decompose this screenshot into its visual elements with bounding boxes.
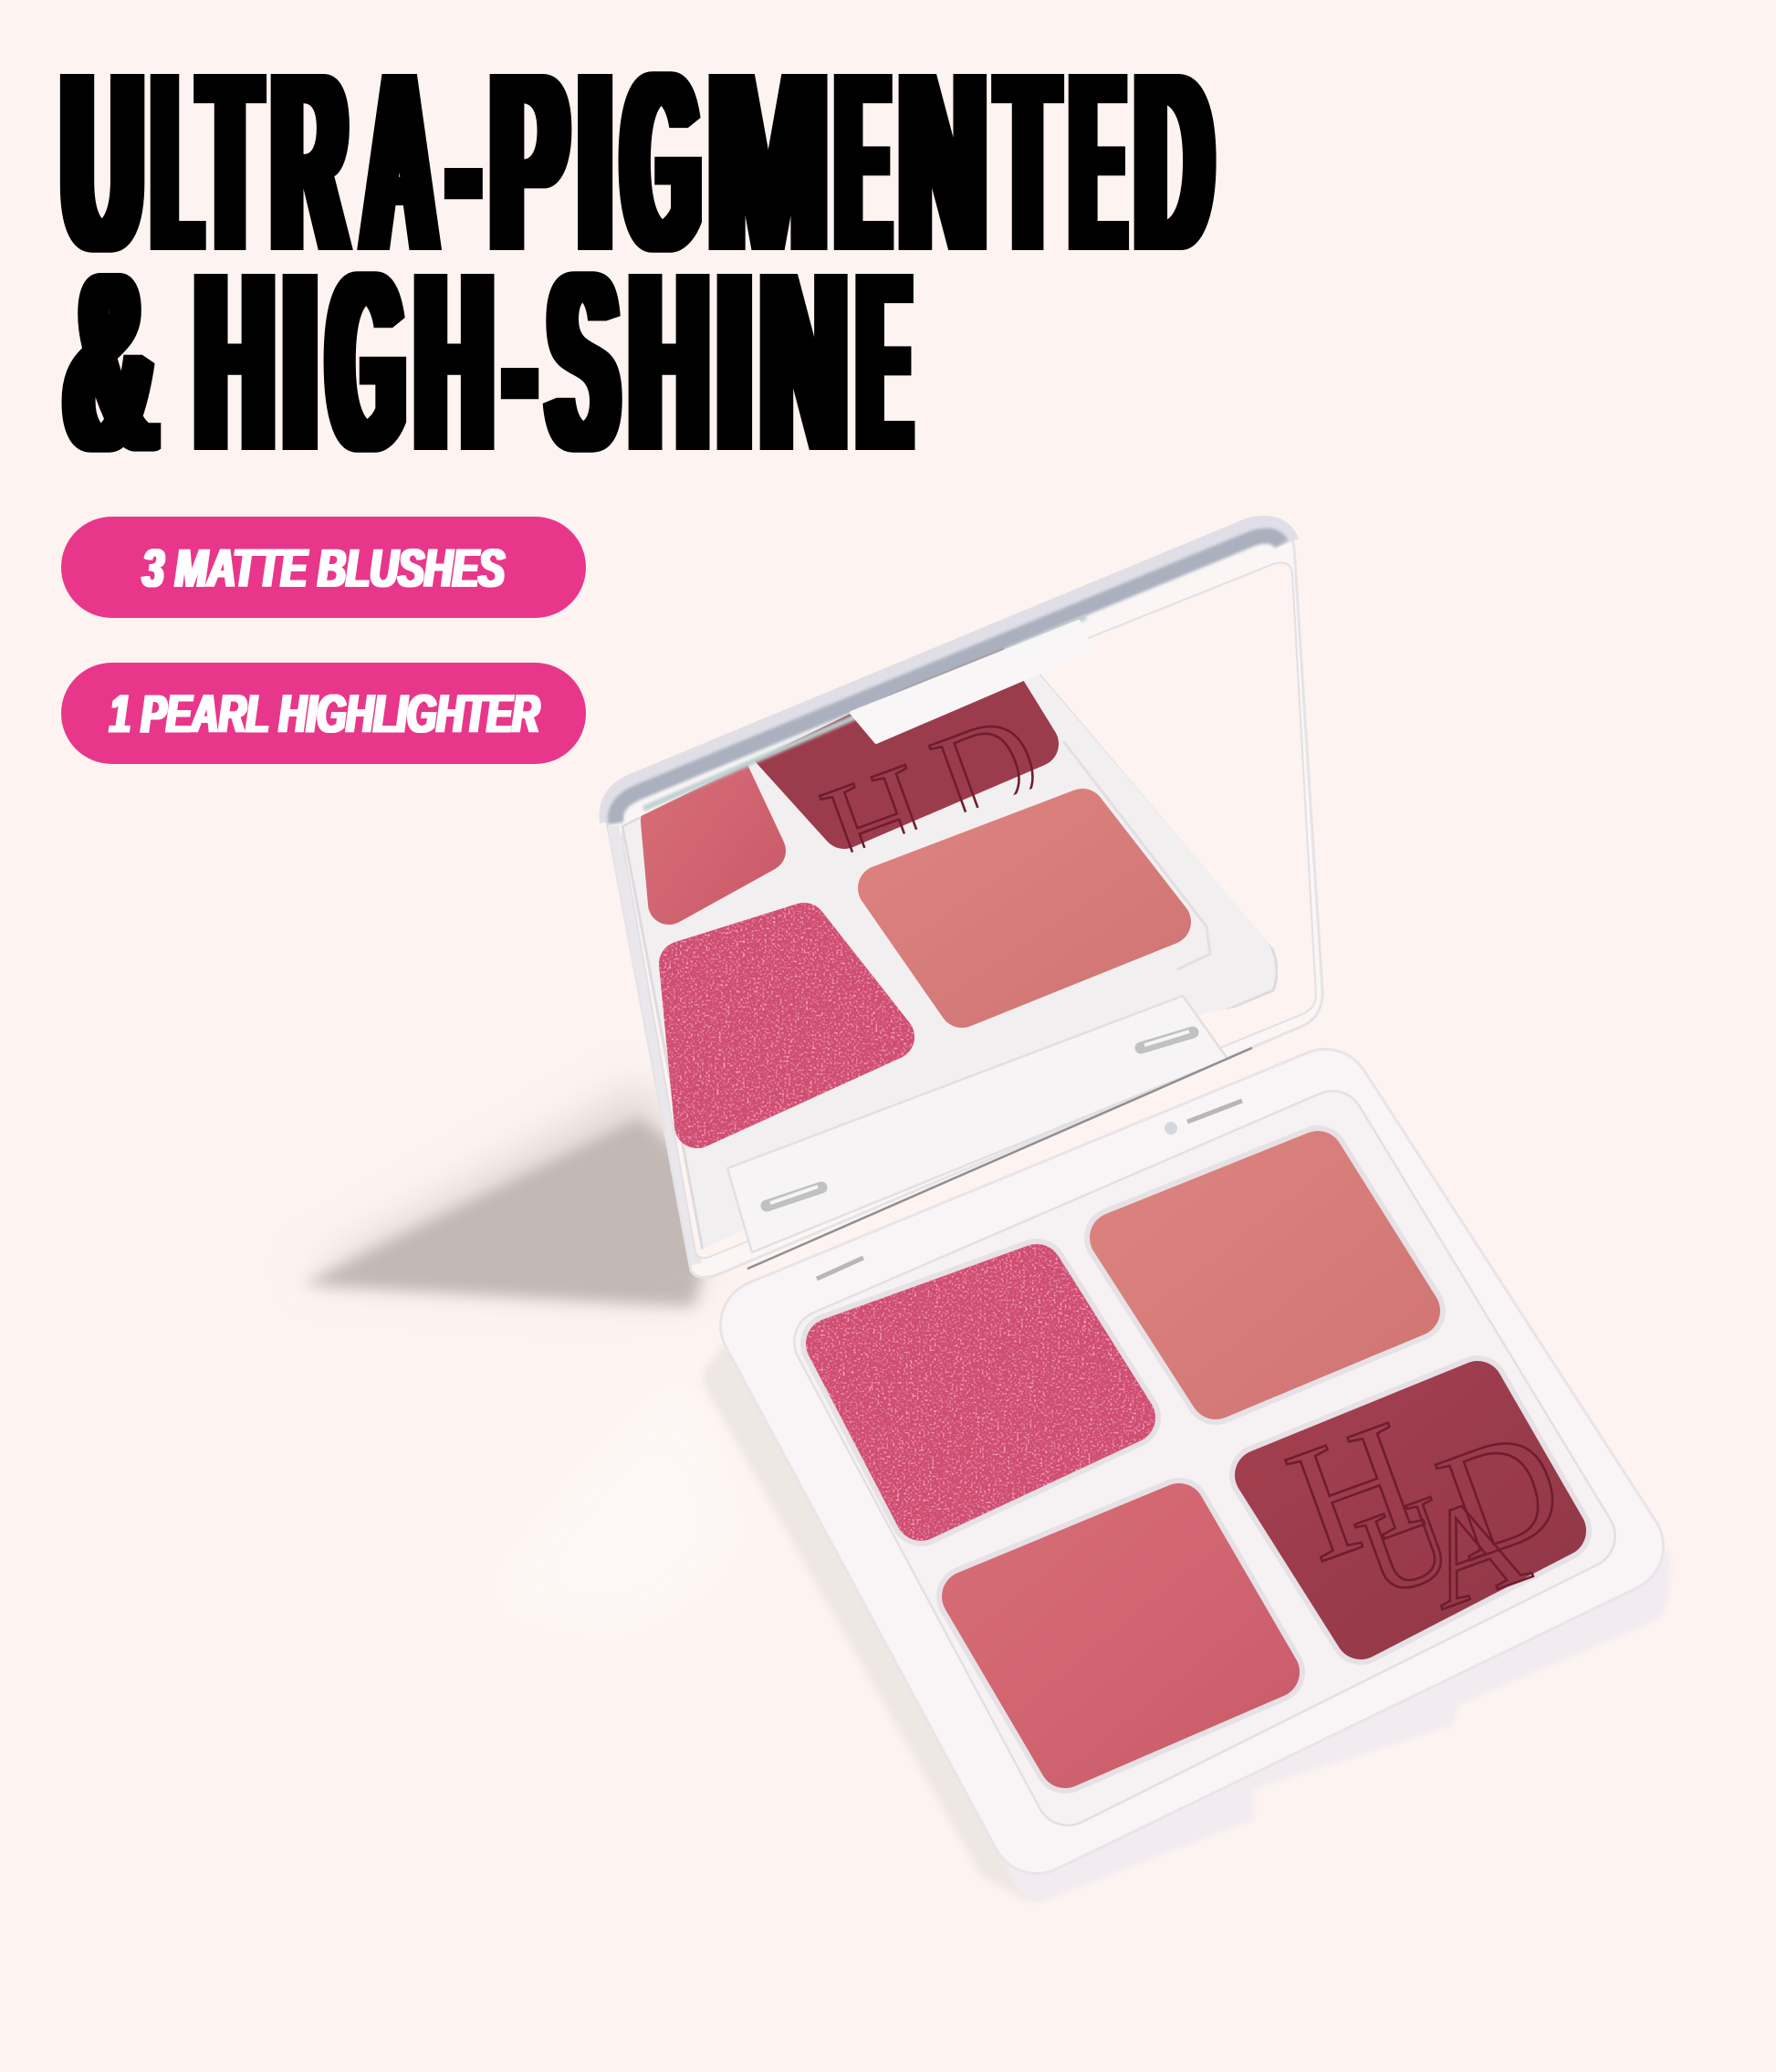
mirror surface <box>622 562 1316 1258</box>
hinge left on lid <box>767 1187 821 1206</box>
title: - <box>507 219 533 504</box>
pill: 1 pearl highlighter: 1 PEARL HIGHLIGHTER <box>110 685 539 744</box>
hinge seam <box>747 1048 1252 1269</box>
title: N <box>900 20 986 305</box>
text: D <box>1136 20 1211 305</box>
hinge right on lid <box>1141 1031 1193 1048</box>
reflected logo <box>818 725 1034 853</box>
mirror lid <box>606 520 1322 1277</box>
blush palette base <box>721 1048 1670 1901</box>
title: S <box>549 219 617 504</box>
title: P <box>491 20 567 305</box>
lid left edge <box>613 826 696 1264</box>
reflected logo: D <box>915 685 1060 862</box>
cast shadow <box>303 1082 721 1306</box>
title: U <box>63 20 142 305</box>
pill: 1 pearl highlighter <box>61 663 586 764</box>
title: - <box>451 20 476 305</box>
light reflection on surface <box>456 1324 757 1643</box>
light blush pan <box>1115 1156 1415 1394</box>
lid body <box>606 520 1322 1277</box>
reflected well line <box>1063 741 1210 969</box>
pill: 3 matte blushes: 3 MATTE BLUSHES <box>142 539 505 599</box>
reflected mid blush pan <box>662 758 765 904</box>
title: G <box>329 219 403 504</box>
title: R <box>273 20 346 305</box>
title: M <box>708 20 828 305</box>
title: I <box>718 219 751 504</box>
shimmer highlighter pan <box>831 1270 1130 1515</box>
reflected base tray <box>622 636 1277 1251</box>
title: L <box>154 20 199 305</box>
title: T <box>202 20 258 305</box>
title: H <box>631 219 707 504</box>
pan pockets <box>831 1156 1561 1763</box>
reflected light blush pan <box>881 811 1168 1005</box>
dark blush pan <box>1260 1387 1561 1634</box>
title: A <box>364 20 435 305</box>
title: I <box>284 219 317 504</box>
palette inner well <box>826 1123 1583 1794</box>
embossed logo: A <box>1400 1461 1544 1638</box>
title: G <box>623 20 699 305</box>
reflected dark blush pan <box>749 639 1036 826</box>
mirror top band <box>611 528 1288 823</box>
title: & <box>66 219 156 504</box>
base hinge right <box>1187 1101 1242 1122</box>
lid lower frame <box>727 996 1228 1252</box>
title: T <box>999 20 1056 305</box>
embossed logo: H <box>1268 1385 1441 1596</box>
mid blush pan <box>967 1509 1274 1763</box>
palette cream side <box>721 1342 1031 1882</box>
embossed logo: D <box>1419 1394 1583 1594</box>
title: H <box>416 219 492 504</box>
base hinge left <box>817 1258 863 1279</box>
pill: 3 matte blushes <box>61 517 586 618</box>
mirror tab <box>851 622 1092 742</box>
title: E <box>860 219 909 504</box>
title: H <box>196 219 273 504</box>
palette outer rim <box>767 1095 1617 1827</box>
title <box>63 20 1211 504</box>
base dot <box>1165 1122 1177 1135</box>
reflected shimmer pan <box>682 926 892 1125</box>
title: I <box>580 20 611 305</box>
palette lower lip <box>757 1351 1670 1901</box>
title: N <box>761 219 846 504</box>
title: E <box>838 20 888 305</box>
embossed logo: U <box>1343 1470 1468 1623</box>
reflected palette <box>622 636 1277 1251</box>
reflected logo: H <box>806 735 950 912</box>
embossed logo <box>1268 1385 1583 1638</box>
title: E <box>1072 20 1123 305</box>
